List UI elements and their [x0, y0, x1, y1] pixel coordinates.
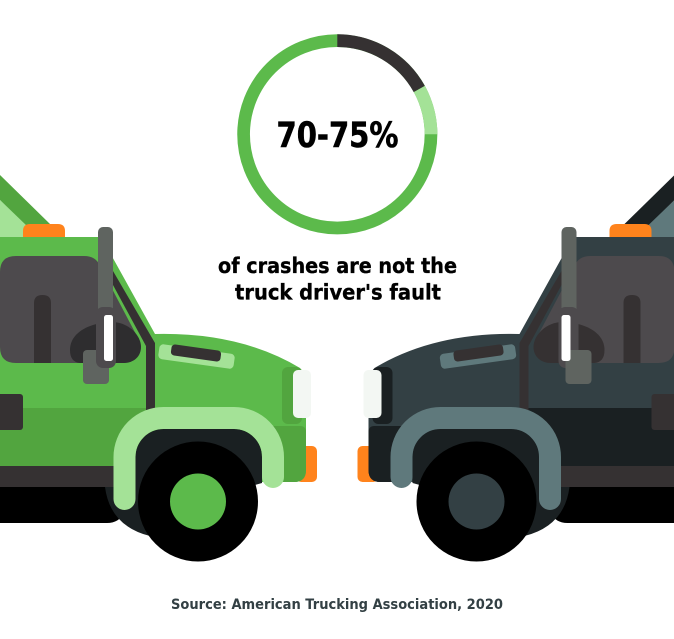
windshield brace [624, 175, 674, 240]
chassis [0, 487, 125, 523]
headlight [364, 370, 382, 418]
door pillar [520, 271, 562, 410]
windshield brace [0, 175, 50, 240]
headlight housing [282, 367, 302, 424]
bumper corner light [296, 446, 317, 482]
lower body panel [0, 408, 150, 466]
lower body panel [524, 408, 674, 466]
cab and hood body [368, 237, 674, 482]
side mirror shadow [534, 322, 604, 363]
side mirror shadow [70, 322, 141, 363]
chassis [550, 487, 674, 523]
headlight housing [372, 367, 392, 424]
fender [402, 418, 550, 499]
wheel [138, 442, 258, 562]
mirror [558, 227, 592, 384]
seat silhouette [34, 295, 51, 363]
fender [124, 418, 273, 499]
bumper corner light [358, 446, 378, 482]
caption: of crashes are not the [218, 254, 457, 279]
donut chart: 70-75% [244, 41, 431, 228]
roof marker light [23, 224, 65, 238]
window [0, 256, 140, 363]
cab and hood body [0, 237, 306, 482]
truck: green left [0, 175, 317, 562]
source line: Source: American Trucking Association, 2020 [171, 597, 503, 613]
mirror [83, 227, 116, 384]
caption [218, 254, 457, 306]
door pillar [113, 271, 155, 410]
headlight [293, 370, 311, 418]
hood lower panel [368, 426, 410, 482]
caption: truck driver's fault [235, 280, 441, 306]
wheel well shadow [412, 429, 570, 536]
door handle [0, 394, 23, 430]
side rail [0, 466, 135, 487]
statistic value: 70-75% [276, 116, 398, 156]
window [534, 256, 674, 363]
wheel well shadow [105, 429, 262, 536]
seat silhouette [624, 295, 640, 363]
hood vent [158, 344, 235, 369]
hood lower panel [265, 426, 306, 482]
hood vent [439, 344, 517, 369]
roof marker light [610, 224, 652, 238]
door handle [652, 394, 674, 430]
truck: dark right [358, 175, 674, 562]
wheel [416, 442, 536, 562]
side rail [540, 466, 674, 487]
